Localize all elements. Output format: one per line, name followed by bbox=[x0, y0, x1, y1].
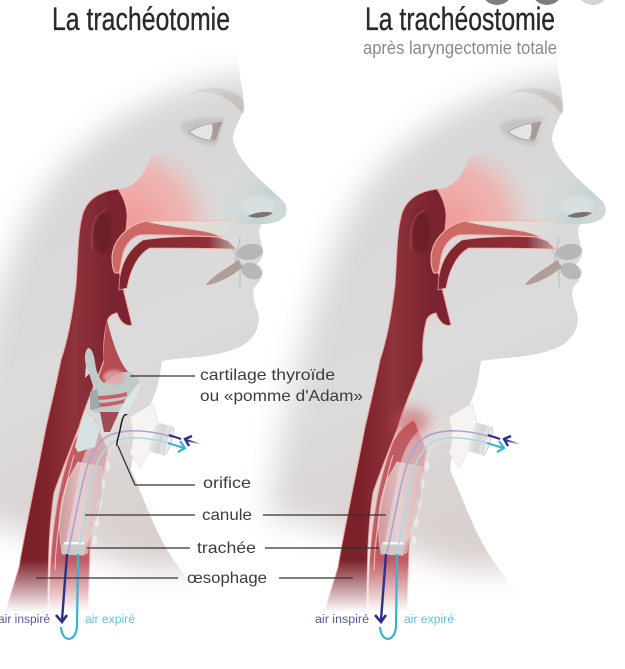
label: exhaled air left: air expiré bbox=[85, 614, 135, 626]
title: tracheostomy: La trachéostomie bbox=[365, 1, 555, 37]
left head illustration: tracheotomy bbox=[0, 50, 287, 639]
subtitle: après laryngectomie totale bbox=[363, 37, 557, 58]
larynx of the left figure bbox=[75, 320, 140, 452]
leader lines bbox=[36, 376, 386, 578]
orifice bracket bbox=[117, 415, 127, 446]
label: canule: canule bbox=[202, 507, 252, 524]
label: exhaled air right: air expiré bbox=[404, 614, 454, 626]
label: oesophagus: œsophage bbox=[187, 570, 267, 587]
label: orifice: orifice bbox=[203, 475, 251, 492]
decorative circles cut at top bbox=[481, 0, 609, 5]
label: Adam's apple: ou «pomme d'Adam» bbox=[200, 388, 363, 405]
right head illustration: tracheostomy bbox=[229, 50, 606, 639]
label: thyroid cartilage: cartilage thyroïde bbox=[200, 367, 335, 384]
stoma glow bbox=[393, 408, 429, 436]
label: trachea: trachée bbox=[197, 540, 256, 557]
title: tracheotomy: La trachéotomie bbox=[52, 1, 230, 37]
label: inhaled air right: air inspiré bbox=[315, 614, 369, 626]
